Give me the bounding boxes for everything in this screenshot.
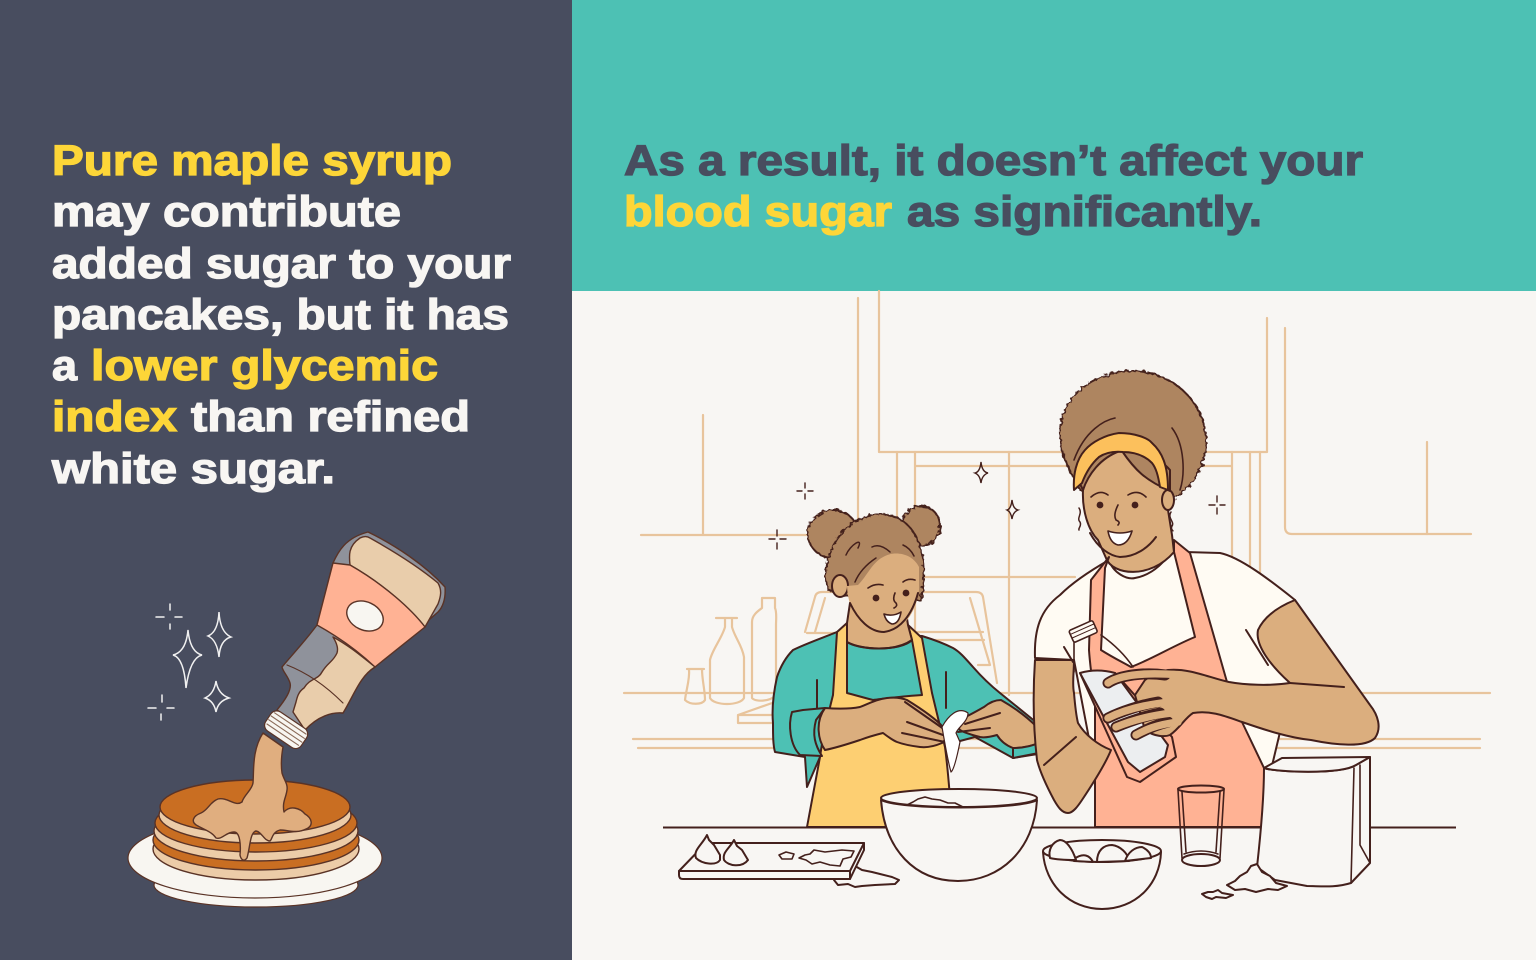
hair lines xyxy=(1074,418,1183,490)
hair at parting xyxy=(1122,451,1170,491)
pancake stack xyxy=(153,780,359,880)
syrup top xyxy=(349,536,441,627)
egg shells xyxy=(695,835,720,864)
left text block: may contribute xyxy=(52,188,401,236)
sweater details xyxy=(817,672,946,708)
white tee xyxy=(1035,548,1300,770)
right arm xyxy=(1135,600,1379,745)
face details xyxy=(868,579,915,624)
chopping board xyxy=(738,702,775,723)
right heading text: blood sugar xyxy=(624,188,892,236)
yellow apron xyxy=(807,623,952,827)
girl arms xyxy=(819,698,948,750)
syrup lower xyxy=(293,637,375,730)
illustration: woman xyxy=(1034,371,1379,827)
right heading text xyxy=(624,137,1363,236)
left text block: white sugar. xyxy=(51,445,335,493)
arm creases xyxy=(1246,630,1344,687)
neck xyxy=(847,603,912,648)
left arm xyxy=(1034,660,1111,813)
illustration: pancakes on plate xyxy=(128,780,382,907)
left text block xyxy=(51,137,511,493)
afro hair xyxy=(1060,371,1206,500)
right heading text: as significantly. xyxy=(907,188,1262,236)
girl left sleeve cuff xyxy=(790,708,825,756)
dish rack xyxy=(805,592,997,683)
jawline xyxy=(850,593,918,632)
left text block: Pure maple syrup xyxy=(52,137,452,185)
illustration: syrup bottle xyxy=(262,532,445,751)
bottle xyxy=(710,618,744,704)
bottle cap xyxy=(1069,620,1098,643)
illustration: syrup stream and puddle xyxy=(193,733,311,860)
label oval xyxy=(342,595,388,637)
illustration: flour bag xyxy=(1257,757,1370,886)
right heading text: As a result, it doesn’t affect your xyxy=(624,137,1363,185)
left text block: than refined xyxy=(191,393,470,441)
flour spill xyxy=(834,866,899,887)
face details xyxy=(1079,492,1173,545)
fingers xyxy=(1108,674,1180,735)
background: kitchen line art xyxy=(624,291,1490,748)
bottle neck xyxy=(1074,635,1133,672)
table line xyxy=(663,826,1456,828)
woman face and neck xyxy=(1083,450,1174,572)
left text block: added sugar to your xyxy=(52,240,511,288)
hair lines xyxy=(846,542,914,582)
tall bottle xyxy=(752,598,776,701)
panel: teal header xyxy=(572,0,1536,291)
ear xyxy=(832,575,848,597)
panel: dark left column xyxy=(0,0,572,960)
flour on board xyxy=(799,850,854,866)
cracked egg xyxy=(942,711,968,772)
board xyxy=(679,843,864,879)
girl right cuff xyxy=(1013,724,1044,758)
bottle body xyxy=(1080,673,1176,782)
icon: sparkles beside syrup bottle xyxy=(148,604,231,720)
label xyxy=(317,563,425,667)
small jar xyxy=(685,669,705,704)
left text block: pancakes, but it has xyxy=(52,291,509,339)
left text block: lower glycemic xyxy=(91,342,438,390)
jawline xyxy=(1090,533,1156,557)
bottle in hand xyxy=(1069,620,1176,782)
salmon apron xyxy=(1089,540,1264,827)
yellow headband xyxy=(1074,433,1168,490)
illustration: girl xyxy=(773,506,1044,827)
sparkles in kitchen xyxy=(769,462,1225,549)
plate xyxy=(128,818,382,907)
teal sweater xyxy=(773,632,1044,787)
bottle ring cap xyxy=(262,708,310,751)
illustration: cutting board with egg shells xyxy=(679,835,899,887)
flour pile and spills xyxy=(1202,864,1287,899)
teal neckline xyxy=(847,640,912,648)
hair buns xyxy=(808,506,940,600)
illustration: drinking glass xyxy=(1178,786,1224,866)
ear xyxy=(1162,490,1174,510)
face xyxy=(847,554,919,632)
bottle glass xyxy=(277,532,445,730)
illustration: large mixing bowl xyxy=(881,789,1037,881)
left text block: a xyxy=(52,342,78,390)
illustration: egg bowl xyxy=(1043,840,1161,909)
left text block: index xyxy=(52,393,177,441)
